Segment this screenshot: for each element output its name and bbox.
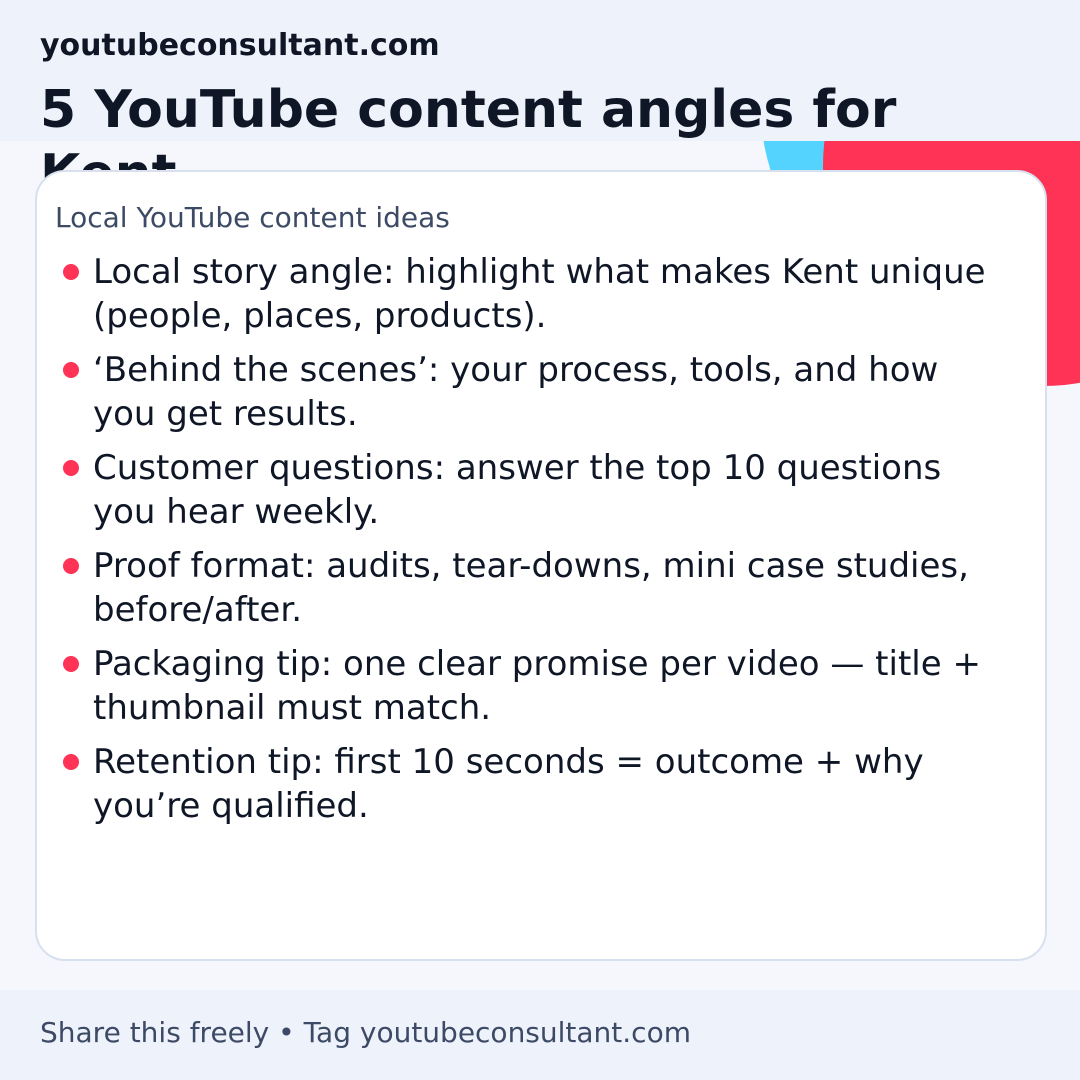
header band bbox=[0, 0, 1080, 141]
card label: Local YouTube content ideas bbox=[55, 201, 450, 234]
bullet list: Local story angle: highlight what makes Kent unique (people, places, products). bbox=[93, 252, 986, 336]
bullet list: Packaging tip: one clear promise per video — title + thumbnail must match. bbox=[93, 644, 981, 728]
title: 5 YouTube content angles for Kent bbox=[40, 80, 896, 204]
bullet list: ‘Behind the scenes’: your process, tools, and how you get results. bbox=[93, 350, 938, 434]
bullet list: Retention tip: first 10 seconds = outcome + why you’re qualified. bbox=[93, 742, 924, 826]
bullet list: Customer questions: answer the top 10 questions you hear weekly. bbox=[93, 448, 941, 532]
icon: red circle bbox=[823, 0, 1080, 386]
footer text: Share this freely • Tag youtubeconsultant.com bbox=[40, 1016, 691, 1049]
footer bbox=[0, 990, 1080, 1080]
bullet list bbox=[63, 252, 986, 826]
icon: cyan circle bbox=[760, 0, 1080, 340]
panel: content ideas card bbox=[35, 170, 1047, 961]
bullet list: Proof format: audits, tear-downs, mini case studies, before/after. bbox=[93, 546, 969, 630]
domain: youtubeconsultant.com bbox=[40, 28, 440, 63]
